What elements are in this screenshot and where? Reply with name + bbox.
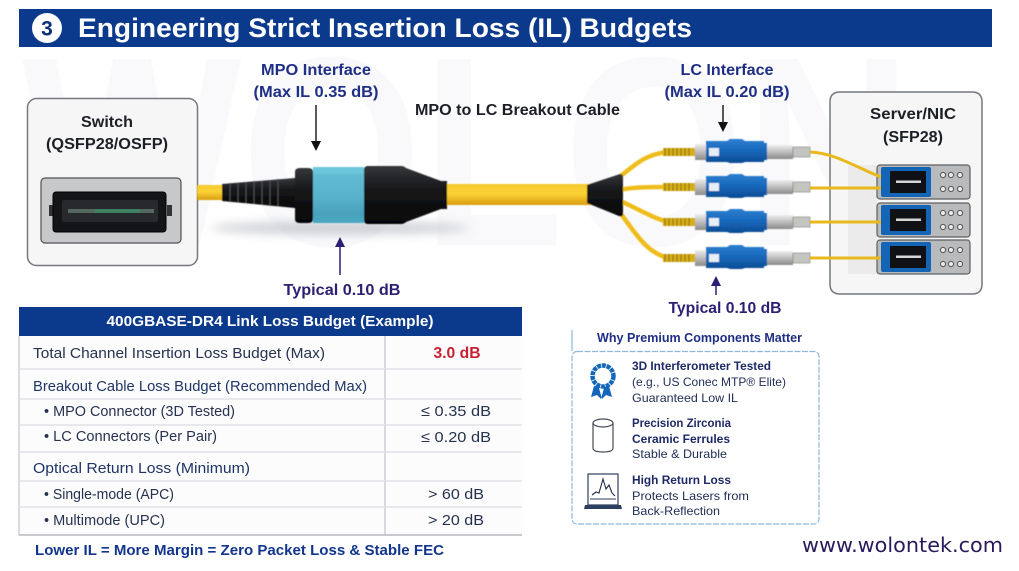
label: LC interface: LC Interface: [680, 62, 774, 79]
SFP module 3: [877, 240, 970, 274]
arrow: MPO interface: [311, 105, 321, 151]
item: 3D interferometer: 3D Interferometer Tested: [632, 359, 771, 373]
label: LC interface: [664, 62, 790, 101]
server label: (SFP28): [883, 129, 943, 146]
row: MPO connector: • MPO Connector (3D Tested): [44, 404, 235, 420]
MPO trunk cable: [197, 184, 591, 205]
switch label: (QSFP28/OSFP): [46, 136, 168, 153]
icon: number badge 3: [32, 13, 62, 43]
server fiber leads: [810, 152, 881, 258]
row: single-mode: > 60 dB: [428, 486, 484, 503]
item: high return loss: Protects Lasers from: [632, 489, 749, 503]
server label: [870, 106, 956, 146]
panel: why premium components matter: [572, 330, 819, 524]
row: total channel: 3.0 dB: [434, 345, 480, 362]
row: return loss heading: Optical Return Loss (Minimum): [33, 461, 250, 477]
header banner: [19, 9, 992, 47]
item: 3D interferometer: (e.g., US Conec MTP® Elite): [632, 375, 786, 389]
item: 3D interferometer: Guaranteed Low IL: [632, 391, 738, 405]
item: zirconia ferrules: Stable & Durable: [632, 447, 727, 461]
label: LC interface: (Max IL 0.20 dB): [664, 84, 790, 101]
label: MPO interface: (Max IL 0.35 dB): [254, 84, 378, 101]
LC connector 1: [663, 139, 810, 163]
switch label: [46, 114, 168, 153]
row: breakout heading: Breakout Cable Loss Budget (Recommended Max): [33, 379, 367, 395]
item: zirconia ferrules: [632, 416, 731, 461]
row: multimode: [44, 512, 484, 529]
SFP module 1: [877, 165, 970, 199]
label: MPO interface: MPO Interface: [261, 62, 371, 79]
label: cable name: MPO to LC Breakout Cable: [415, 102, 620, 119]
LC connector 2: [663, 174, 810, 198]
item: high return loss: Back-Reflection: [632, 504, 720, 518]
arrow: LC interface: [718, 105, 728, 132]
icon: laptop with trace: [584, 474, 622, 509]
row: LC connectors: [44, 429, 491, 446]
row: single-mode: • Single-mode (APC): [44, 487, 174, 503]
item: zirconia ferrules: Ceramic Ferrules: [632, 432, 730, 446]
label: MPO interface: [254, 62, 378, 101]
panel heading: Why Premium Components Matter: [597, 331, 802, 345]
LC connector 4: [663, 245, 810, 269]
switch label: Switch: [81, 114, 133, 131]
icon: number badge 3: 3: [41, 18, 53, 40]
title: Engineering Strict Insertion Loss (IL) Budgets: [78, 13, 692, 43]
fanout branches: [618, 152, 668, 258]
label: MPO typical: Typical 0.10 dB: [284, 282, 400, 299]
cable shadow: [210, 222, 470, 234]
table header: [19, 307, 522, 336]
row: LC connectors: ≤ 0.20 dB: [421, 429, 491, 446]
item: high return loss: [632, 473, 749, 518]
item: 3D interferometer: [632, 359, 786, 405]
panel: server NIC: [810, 92, 982, 294]
row: single-mode: [44, 486, 484, 503]
label: LC typical: Typical 0.10 dB: [668, 300, 782, 317]
row: LC connectors: • LC Connectors (Per Pair): [44, 429, 217, 445]
takeaway line: Lower IL = More Margin = Zero Packet Loss & Stable FEC: [35, 543, 445, 559]
server label: Server/NIC: [870, 106, 956, 123]
arrow: LC typical: [711, 276, 721, 295]
panel: link loss budget table: [19, 307, 522, 535]
switch port: [41, 178, 181, 243]
fanout boot: [587, 174, 623, 216]
item: zirconia ferrules: Precision Zirconia: [632, 416, 731, 430]
panel: switch: [28, 98, 198, 266]
arrow: MPO typical: [335, 237, 345, 275]
SFP module 2: [877, 203, 970, 237]
row: total channel: Total Channel Insertion Loss Budget (Max): [33, 346, 325, 362]
website url: www.wolontek.com: [802, 533, 1003, 557]
LC connector 3: [663, 209, 810, 233]
row: total channel: [33, 345, 480, 362]
table header: 400GBASE-DR4 Link Loss Budget (Example): [106, 314, 434, 330]
MPO to LC breakout cable: [197, 139, 810, 269]
icon: ferrule cylinder: [593, 419, 613, 452]
row: multimode: • Multimode (UPC): [44, 513, 165, 529]
item: high return loss: High Return Loss: [632, 473, 731, 487]
MPO connector: [222, 166, 447, 224]
icon: award ribbon: [591, 366, 614, 399]
row: MPO connector: [44, 403, 491, 420]
row: multimode: > 20 dB: [428, 512, 484, 529]
row: MPO connector: ≤ 0.35 dB: [421, 403, 491, 420]
